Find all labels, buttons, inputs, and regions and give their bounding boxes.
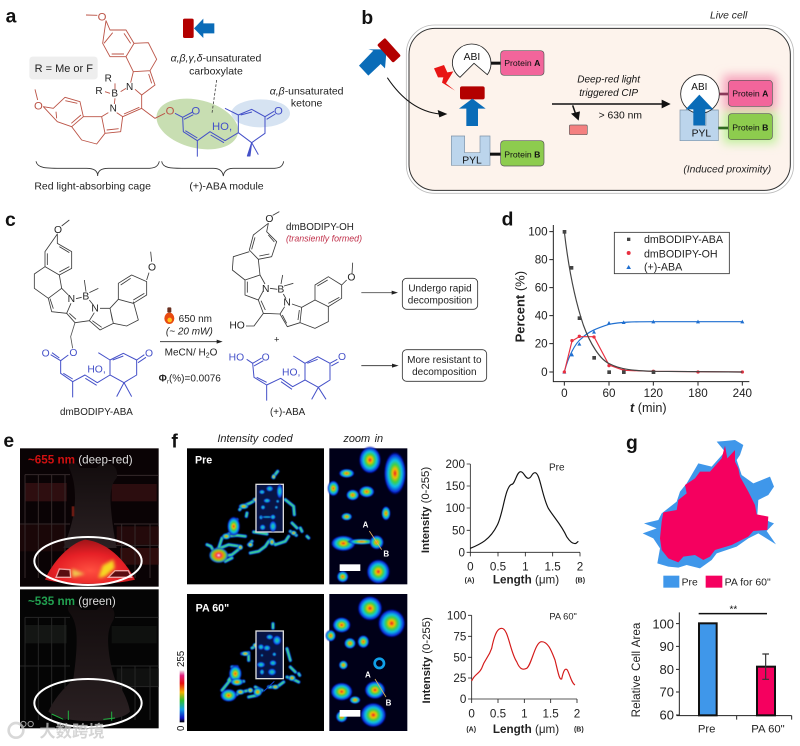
bar chart: Pre xyxy=(698,724,715,736)
panel f: intensity coded images xyxy=(9,431,407,741)
y ticks: 60 xyxy=(535,282,548,295)
bar chart: 90 xyxy=(660,639,674,654)
boron atoms: N xyxy=(110,104,117,115)
carboxylate label: carboxylate xyxy=(189,67,243,78)
label b: b xyxy=(361,8,373,29)
blue atoms xyxy=(191,106,283,133)
image pre xyxy=(187,448,324,584)
blue atoms right: O xyxy=(262,353,270,364)
bar chart: PA 60" xyxy=(751,724,785,736)
ABA right xyxy=(247,356,339,401)
line charts f xyxy=(420,458,585,736)
wavelength: > 630 nm xyxy=(599,110,642,121)
linker b xyxy=(490,153,501,156)
atoms right: B xyxy=(277,285,284,296)
black atoms c left: O xyxy=(148,263,156,274)
box resistant: More resistant to xyxy=(407,355,482,366)
reaction arrow c xyxy=(160,340,223,344)
ABI right xyxy=(681,75,719,113)
legend g: PA for 60" xyxy=(725,578,771,589)
pre profile: 1.5 xyxy=(545,561,561,574)
legend xyxy=(614,232,729,274)
protein B right: Protein B xyxy=(732,123,768,133)
zoom PA: B xyxy=(386,699,392,708)
dmBODIPY-ABA black part xyxy=(34,220,152,348)
arrow top xyxy=(361,291,398,295)
box decomposition: decomposition xyxy=(408,296,472,307)
image PA: PA 60" xyxy=(196,603,229,615)
induced proximity: (Induced proximity) xyxy=(683,165,771,176)
pre profile: 100 xyxy=(446,502,466,515)
box decomposition: Undergo rapid xyxy=(408,283,472,294)
plus: + xyxy=(274,335,279,345)
conditions: MeCN/ H xyxy=(165,347,206,358)
box decomposition xyxy=(402,278,478,309)
pre profile: Length (μm) xyxy=(493,574,559,587)
red atoms: O xyxy=(34,100,43,112)
PA profile: PA 60" xyxy=(549,612,577,622)
zoom pre: A xyxy=(363,521,369,530)
boron atoms: B xyxy=(111,89,118,100)
cage label: Red light-absorbing cage xyxy=(34,181,151,192)
blue atoms left xyxy=(42,348,153,376)
x ticks: 240 xyxy=(733,387,753,400)
release arrow xyxy=(571,105,580,121)
protein A right: Protein A xyxy=(732,88,769,98)
bulb icon xyxy=(164,307,174,324)
conditions: O xyxy=(210,347,218,358)
bar chart: 80 xyxy=(660,662,674,677)
PA profile: 25 xyxy=(453,672,466,685)
pre profile: 150 xyxy=(446,480,466,493)
PA profile: (A) xyxy=(466,727,476,734)
blue atoms right: O xyxy=(338,352,346,363)
panel a: caged ABA structure xyxy=(6,7,344,192)
legend g xyxy=(663,576,771,589)
legend: dmBODIPY-OH xyxy=(644,248,718,260)
blue atoms left: O xyxy=(42,349,50,360)
cell outline outer xyxy=(406,25,794,193)
panel b: mechanism xyxy=(359,8,794,193)
bar chart: ** xyxy=(729,604,737,615)
legend g: Pre xyxy=(682,578,698,589)
PA profile xyxy=(421,609,584,736)
ketone label xyxy=(270,86,344,110)
PA profile: 0.5 xyxy=(490,707,506,720)
watermark: 大数跨境 xyxy=(39,722,105,741)
axes xyxy=(549,225,749,386)
bar chart xyxy=(630,604,792,736)
red atoms: O xyxy=(98,12,107,24)
PA profile: 0 xyxy=(468,707,475,720)
glows xyxy=(723,75,777,143)
protein B: Protein B xyxy=(504,149,540,159)
PA profile: 2 xyxy=(574,707,580,720)
name dmBODIPY-OH xyxy=(286,222,362,244)
blue atoms right: HO xyxy=(229,353,244,364)
linkers right xyxy=(718,93,729,129)
x ticks: 60 xyxy=(603,387,616,400)
red atoms xyxy=(34,12,175,118)
y ticks: 20 xyxy=(535,338,548,351)
label g: g xyxy=(626,433,638,454)
zoom pre: B xyxy=(383,549,389,558)
trigger label: triggered CIP xyxy=(579,88,638,99)
live cell label: Live cell xyxy=(710,11,748,22)
PA profile: 75 xyxy=(453,630,466,643)
pre profile: 1 xyxy=(522,561,529,574)
legend: (+)-ABA xyxy=(644,262,683,274)
conditions xyxy=(159,314,221,385)
black atoms c left: B xyxy=(82,291,89,302)
y ticks: 80 xyxy=(535,254,548,267)
blue atoms right xyxy=(229,352,346,378)
boron atoms: R xyxy=(105,73,112,84)
red atoms: O xyxy=(166,106,175,118)
PA profile: Intensity (0-255) xyxy=(421,617,433,703)
linker xyxy=(491,62,501,65)
PA profile: 1.5 xyxy=(543,707,559,720)
conditions: (%)=0.0076 xyxy=(169,373,221,384)
photo green: ~535 nm (green) xyxy=(28,595,116,608)
zoom PA xyxy=(325,594,407,731)
pre profile xyxy=(420,458,585,587)
column heading 2: zoom in xyxy=(342,433,383,445)
PYL right: PYL xyxy=(692,128,711,139)
PA profile: 0 xyxy=(460,693,467,706)
watermark xyxy=(9,721,105,741)
label d: d xyxy=(502,209,513,230)
released cage xyxy=(569,125,587,135)
dmBODIPY-OH black xyxy=(232,212,353,328)
name ABA: (+)-ABA xyxy=(270,407,306,418)
x ticks: 180 xyxy=(688,387,708,400)
panel d: kinetics chart xyxy=(502,209,753,415)
blue atoms left: O xyxy=(69,348,77,359)
ABA module label: (+)-ABA module xyxy=(189,181,264,192)
protein A right xyxy=(728,80,772,106)
arrow bottom xyxy=(361,364,399,368)
x title: t (min) xyxy=(630,401,667,415)
bar chart: Relative Cell Area xyxy=(630,622,643,717)
boron atoms xyxy=(95,73,133,115)
black atoms c left: N xyxy=(91,303,99,314)
entry arrow xyxy=(387,78,447,117)
zoom PA: A xyxy=(365,670,371,679)
pre profile: 0 xyxy=(459,546,466,559)
pre profile: Pre xyxy=(549,463,565,474)
bound caged ABA xyxy=(459,86,486,126)
y title: Percent (%) xyxy=(513,271,528,342)
atoms right: N xyxy=(283,297,291,308)
blue atoms left: HO, xyxy=(87,365,106,376)
green highlight ellipse xyxy=(151,91,244,157)
ketone label: α,β-unsaturated xyxy=(270,86,344,97)
x ticks: 120 xyxy=(644,387,664,400)
protein A: Protein A xyxy=(504,58,541,68)
bar chart: 70 xyxy=(660,685,674,700)
atoms right xyxy=(229,214,355,332)
panel g: cell area xyxy=(626,433,792,736)
bound ABA arrow xyxy=(686,95,713,125)
pre profile: (B) xyxy=(575,577,585,584)
black atoms c left xyxy=(54,225,156,314)
panel c: photolysis reaction xyxy=(5,210,487,418)
label e: e xyxy=(3,431,14,452)
PA profile: (B) xyxy=(574,727,584,734)
protein B xyxy=(501,141,544,166)
blue atoms: O xyxy=(274,106,283,118)
PYL right xyxy=(680,110,718,141)
box resistant: decomposition xyxy=(412,367,477,378)
conditions: Φ xyxy=(159,373,167,384)
pre profile: 200 xyxy=(446,458,466,471)
black atoms c left: O xyxy=(54,225,62,236)
leader xyxy=(212,80,217,113)
blue atoms right: HO, xyxy=(282,367,300,378)
pre profile: (A) xyxy=(465,577,474,584)
y ticks: 0 xyxy=(541,366,548,379)
black atoms c left: N xyxy=(68,294,75,305)
legend: dmBODIPY-ABA xyxy=(644,234,724,246)
conditions: (~ 20 mW) xyxy=(166,326,213,337)
PA profile: Length (μm) xyxy=(493,723,559,736)
y ticks: 40 xyxy=(535,310,548,323)
bar chart: 100 xyxy=(652,616,674,631)
PA cell outline xyxy=(660,446,768,562)
lightning xyxy=(434,65,455,91)
colour scale xyxy=(176,651,187,731)
image PA xyxy=(187,594,324,731)
red cage structure xyxy=(35,15,165,144)
label c: c xyxy=(5,210,16,231)
ABI right: ABI xyxy=(691,82,707,93)
zoom pre xyxy=(327,446,407,584)
name dmBODIPY-OH: dmBODIPY-OH xyxy=(286,222,354,233)
atoms right: HO xyxy=(229,321,245,332)
series ABA black xyxy=(563,230,742,374)
external caged ligand xyxy=(359,38,401,76)
colour scale: 0 xyxy=(176,726,187,731)
pre profile: 2 xyxy=(577,561,583,574)
boron atoms: N xyxy=(126,82,133,93)
blue atoms: O xyxy=(191,106,200,118)
series OH red xyxy=(563,335,744,374)
y ticks xyxy=(528,226,548,379)
PA profile: 1 xyxy=(521,707,528,720)
cell body xyxy=(409,28,790,190)
ketone label: ketone xyxy=(291,99,323,110)
PYL left xyxy=(451,136,490,166)
protein A xyxy=(501,51,544,75)
atoms right: O xyxy=(265,214,273,225)
blue atoms left: O xyxy=(145,349,153,360)
conditions: 2 xyxy=(206,352,210,359)
label a: a xyxy=(6,7,17,28)
PA profile: 50 xyxy=(453,651,467,664)
reaction arrow xyxy=(552,100,671,108)
name dmBODIPY-OH: (transiently formed) xyxy=(286,234,362,244)
blue atoms: HO, xyxy=(212,121,232,133)
photo red: ~655 nm (deep-red) xyxy=(28,453,133,466)
photo red xyxy=(20,448,159,587)
boron atoms: R xyxy=(95,86,103,97)
braces xyxy=(36,161,284,176)
conditions: 650 nm xyxy=(179,314,212,325)
panel e: mouse photographs xyxy=(3,431,159,728)
photo green xyxy=(20,589,159,728)
ABI left: ABI xyxy=(464,52,480,63)
pre profile: 0.5 xyxy=(490,561,506,574)
compound name left: dmBODIPY-ABA xyxy=(60,407,133,418)
bar chart: 60 xyxy=(660,708,674,723)
image pre: Pre xyxy=(195,455,212,467)
protein B right xyxy=(728,114,772,140)
blue ABA module xyxy=(175,108,275,157)
colour scale: 255 xyxy=(176,651,187,667)
pre profile: Intensity (0-255) xyxy=(420,467,432,553)
x ticks: 0 xyxy=(561,387,568,400)
PA profile: 100 xyxy=(447,609,467,622)
pre cell outline xyxy=(643,440,776,568)
trigger label: Deep-red light xyxy=(577,75,641,86)
caged ligand glyph xyxy=(183,19,214,38)
atoms right: N xyxy=(262,284,269,295)
trigger label xyxy=(577,75,641,99)
pre profile: 0 xyxy=(467,561,474,574)
series ABA blue xyxy=(562,320,744,374)
blue highlight ellipse xyxy=(231,99,290,127)
R group note xyxy=(29,57,98,79)
conditions: r xyxy=(167,378,170,385)
carboxylate label: α,β,γ,δ-unsaturated xyxy=(171,53,261,64)
x ticks xyxy=(561,387,753,400)
column heading 1: Intensity coded xyxy=(217,433,293,445)
ABI left xyxy=(452,44,491,77)
y ticks: 100 xyxy=(528,226,548,239)
atoms right: O xyxy=(347,273,355,284)
PYL left: PYL xyxy=(462,155,482,166)
pre profile: 50 xyxy=(452,524,466,537)
carboxylate label xyxy=(171,53,261,78)
R group note: R = Me or F xyxy=(35,63,93,75)
blue ABA left xyxy=(51,353,146,397)
box resistant xyxy=(402,350,487,381)
label f: f xyxy=(171,431,178,452)
